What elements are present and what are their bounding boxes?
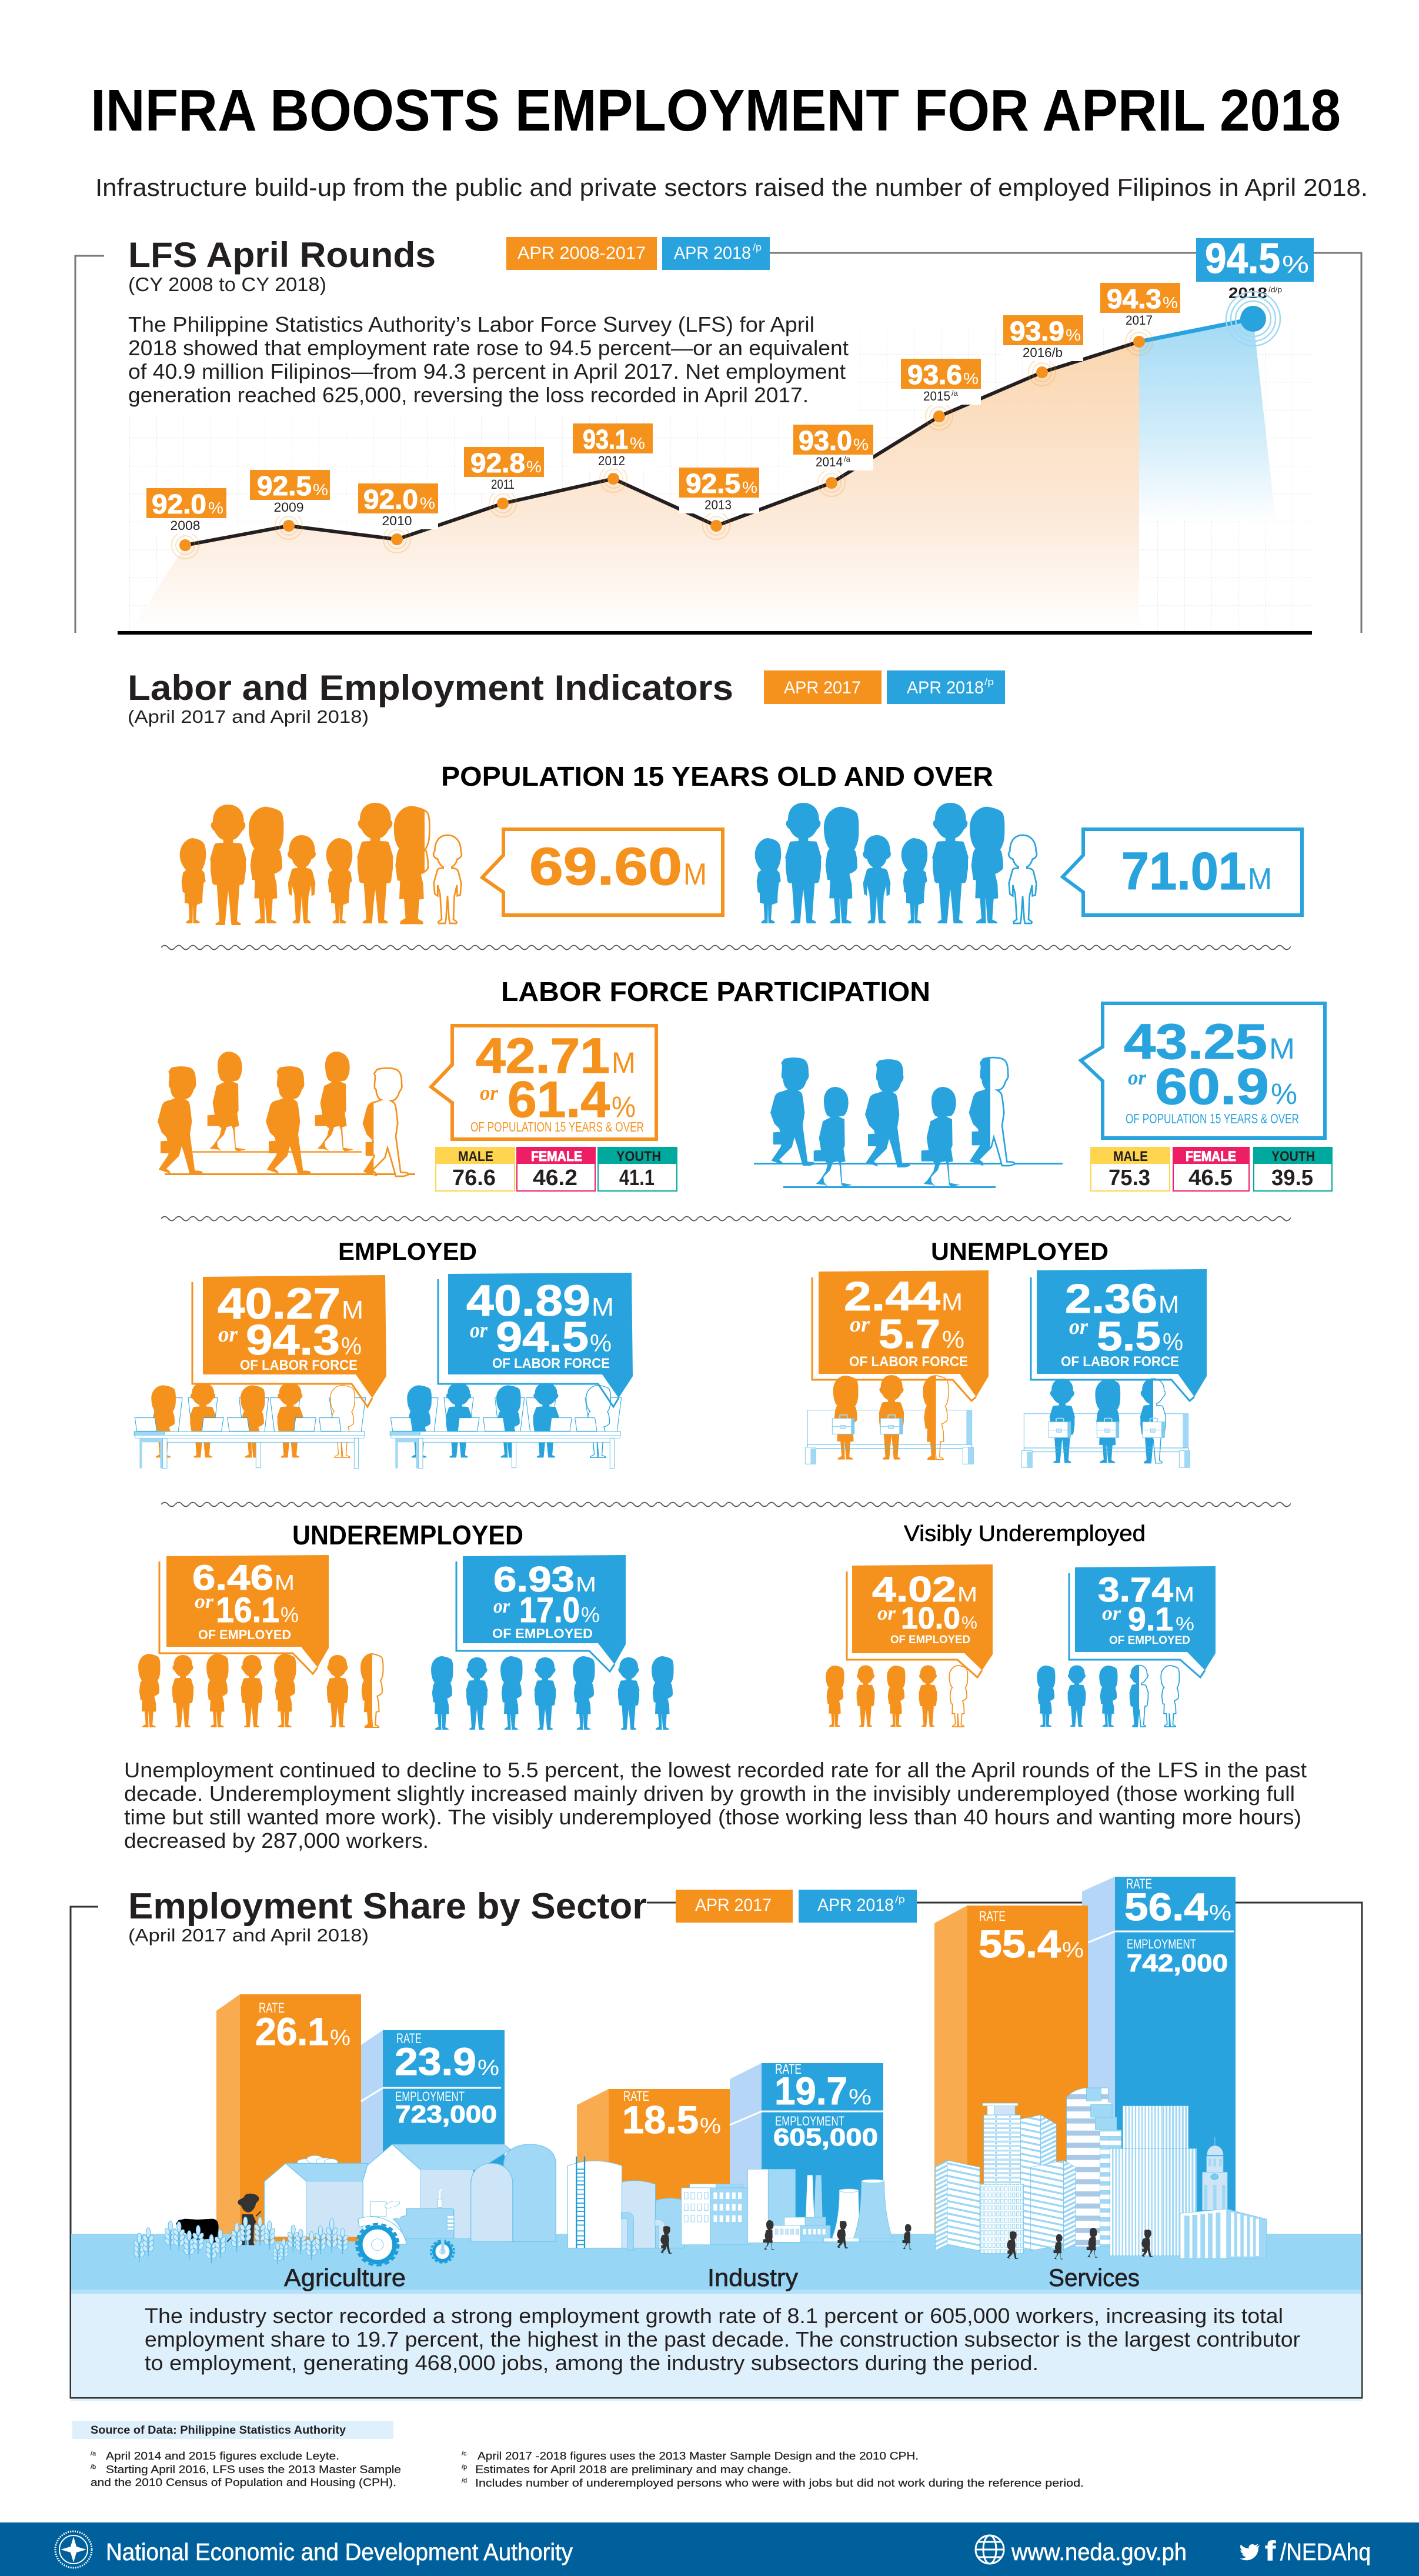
bar: services 2018: 56.4: [1124, 1885, 1208, 1928]
callout: 4.02M visibly underemployed 2017: 4.02: [872, 1570, 956, 1609]
label 2013: [679, 468, 759, 513]
panel: Employment Share by Sector: [71, 1876, 1362, 2401]
text: website: www.neda.gov.ph: [1011, 2538, 1187, 2565]
label 2009: 92.5: [257, 471, 312, 501]
legend: /p: [984, 676, 994, 688]
source box: [72, 2421, 393, 2439]
icon: desk workers 2017: [134, 1383, 366, 1469]
label 2018: [1196, 235, 1314, 302]
table: participation rates 2018: [1091, 1147, 1332, 1191]
table: participation rates 2018: MALE: [1113, 1149, 1148, 1164]
bar: agriculture 2018: %: [478, 2056, 499, 2080]
callout: 2.44M unemployed 2017: 2.44: [844, 1273, 940, 1319]
footnotes: /p: [462, 2464, 467, 2471]
callout: 42.71M or 61.4%: or: [480, 1081, 499, 1105]
callout: 43.25M or 60.9%: 60.9: [1155, 1059, 1269, 1115]
text block: unemployment summary: time but still wanted more work). The visibly underemployed (those working less than 40 hours and wanting more hours): [124, 1805, 1301, 1829]
label 2011: %: [526, 458, 542, 476]
callout: 71.01M: M: [1248, 862, 1272, 896]
text block: unemployment summary: [124, 1758, 1307, 1853]
label 2008: 2008: [171, 518, 200, 533]
table: participation rates 2017: MALE: [458, 1149, 493, 1164]
callout: 42.71M or 61.4%: [431, 1026, 656, 1139]
callout: 43.25M or 60.9%: 43.25: [1124, 1014, 1267, 1069]
chart: employment rate area and line: [118, 319, 1314, 635]
callout: 40.27M employed 2017: or: [218, 1322, 238, 1347]
legend: APR 2017: [695, 1896, 772, 1915]
panel: LFS April Rounds: [75, 235, 1361, 635]
callout: 2.44M unemployed 2017: or: [850, 1312, 870, 1337]
bar: services 2018: %: [1209, 1901, 1231, 1926]
callout: 3.74M visibly underemployed 2018: %: [1176, 1613, 1194, 1634]
table: participation rates 2017: FEMALE: [531, 1149, 582, 1164]
label 2012: [573, 423, 653, 469]
callout: 6.93M underemployed 2018: or: [493, 1596, 510, 1617]
callout: 6.46M underemployed 2017: 6.46: [192, 1558, 273, 1597]
heading: employed: EMPLOYED: [338, 1237, 477, 1265]
bar: industry 2018: [730, 2061, 883, 2240]
table: participation rates 2017: YOUTH: [616, 1149, 661, 1164]
callout: 2.44M unemployed 2017: %: [942, 1326, 964, 1353]
label 2015: [901, 359, 981, 405]
callout: 43.25M or 60.9%: OF POPULATION 15 YEARS & OVER: [1126, 1111, 1299, 1126]
label 2018: 2018: [1228, 284, 1267, 302]
footnotes: April 2017 -2018 figures uses the 2013 Master Sample Design and the 2010 CPH.: [478, 2450, 919, 2462]
illustration: city skyline: [936, 2088, 1267, 2258]
legend: /p: [895, 1894, 905, 1905]
bar: industry 2017: 18.5: [622, 2098, 699, 2141]
callout: 71.01M: 71.01: [1121, 842, 1246, 901]
callout: 42.71M or 61.4%: 61.4: [507, 1072, 610, 1128]
text: agency name: National Economic and Development Authority: [106, 2538, 573, 2565]
callout: 6.46M underemployed 2017: or: [195, 1591, 214, 1613]
callout: 40.27M employed 2017: 94.3: [246, 1317, 340, 1364]
callout: 42.71M or 61.4%: %: [612, 1090, 636, 1123]
footnotes: /a: [91, 2450, 96, 2457]
icon: NEDA seal: [55, 2531, 92, 2568]
label 2015: %: [963, 369, 979, 388]
legend: [676, 1890, 917, 1923]
bar: industry 2017: [577, 2088, 730, 2241]
label 2016: [1003, 315, 1083, 361]
callout: 6.46M underemployed 2017: M: [275, 1570, 295, 1594]
text block: unemployment summary: decade. Underemployment slightly increased mainly driven by growth in the invisibly underemployed (those working full: [124, 1781, 1295, 1806]
callout: 2.44M unemployed 2017: OF LABOR FORCE: [849, 1354, 968, 1370]
callout: 40.89M employed 2018: 94.5: [496, 1314, 589, 1361]
table: participation rates 2017: 41.1: [619, 1166, 655, 1190]
callout: 2.36M unemployed 2018: 5.5: [1097, 1313, 1161, 1359]
footnotes: April 2014 and 2015 figures exclude Leyte.: [106, 2450, 339, 2462]
bar: agriculture 2018: RATE: [396, 2031, 422, 2047]
text block: LFS summary: of 40.9 million Filipinos—from 94.3 percent in April 2017. Net employment: [128, 359, 846, 383]
callout: 40.27M employed 2017: %: [341, 1332, 362, 1360]
callout: 40.89M employed 2018: OF LABOR FORCE: [492, 1356, 610, 1372]
label 2010: %: [420, 494, 435, 512]
bar: industry 2018: 19.7: [774, 2069, 847, 2113]
callout: 40.89M employed 2018: M: [592, 1293, 614, 1322]
footnotes: Includes number of underemployed persons who were with jobs but did not work during the reference period.: [475, 2477, 1084, 2489]
bar: industry 2017: %: [700, 2114, 721, 2138]
footer: [0, 2522, 1419, 2576]
source box: Source of Data: Philippine Statistics Authority: [91, 2424, 346, 2437]
label 2012: 2012: [598, 453, 625, 468]
callout: 2.36M unemployed 2018: 2.36: [1065, 1276, 1157, 1322]
legend: APR 2018: [674, 243, 751, 263]
label 2018: 94.5: [1205, 235, 1280, 282]
callout: 4.02M visibly underemployed 2017: OF EMPLOYED: [890, 1634, 970, 1646]
label 2010: 2010: [382, 513, 412, 528]
label 2017: 2017: [1126, 313, 1153, 328]
text block: unemployment summary: decreased by 287,000 workers.: [124, 1828, 429, 1853]
icon: globe: [976, 2535, 1004, 2564]
icon: walkers 2017: [158, 1052, 415, 1176]
bar: services 2017: [934, 1906, 1088, 2235]
bar: services 2018: [1082, 1876, 1236, 2240]
callout: 2.44M unemployed 2017: 5.7: [879, 1311, 940, 1357]
bar: industry 2018: 605,000: [773, 2123, 878, 2151]
bar: services 2017: %: [1062, 1938, 1084, 1963]
callout: 2.36M unemployed 2018: M: [1158, 1290, 1179, 1318]
label 2018: %: [1282, 251, 1309, 278]
label 2008: [146, 488, 226, 534]
callout: 40.27M employed 2017: OF LABOR FORCE: [240, 1357, 358, 1373]
icon: job seekers on bench 2018: [1021, 1379, 1190, 1467]
ground band: [71, 2234, 1361, 2290]
label 2016: 2016/b: [1023, 345, 1063, 360]
table: participation rates 2017: [436, 1147, 677, 1191]
label 2009: [250, 470, 330, 516]
label 2013: 92.5: [686, 468, 740, 499]
label 2015: 93.6: [907, 359, 962, 390]
callout: 6.93M underemployed 2018: 6.93: [493, 1560, 575, 1599]
bar: agriculture 2017: 26.1: [255, 2010, 329, 2053]
callout: 3.74M visibly underemployed 2018: M: [1174, 1582, 1194, 1606]
footnotes: /d: [462, 2477, 467, 2484]
bar: industry 2018: EMPLOYMENT: [775, 2114, 844, 2128]
text block: LFS summary: 2018 showed that employment rate rose to 94.5 percent—or an equivalent: [128, 336, 849, 360]
callout: 43.25M or 60.9%: M: [1269, 1032, 1295, 1065]
callout: 42.71M or 61.4%: 42.71: [476, 1028, 610, 1083]
text block: industry summary: to employment, generating 468,000 jobs, among the industry subsectors during the period.: [145, 2351, 1039, 2375]
text: facebook glyph: f: [1265, 2535, 1276, 2566]
label 2009: 2009: [274, 500, 303, 515]
legend: APR 2017: [784, 678, 861, 698]
heading: underemployed: UNDEREMPLOYED: [292, 1520, 523, 1550]
heading: labor force participation: LABOR FORCE PARTICIPATION: [501, 976, 930, 1007]
callout: 6.46M underemployed 2017: [159, 1555, 329, 1674]
bar: services 2018: EMPLOYMENT: [1127, 1937, 1196, 1951]
callout: 3.74M visibly underemployed 2018: or: [1102, 1603, 1121, 1624]
label: Industry: Industry: [707, 2264, 798, 2291]
callout: 40.27M employed 2017: M: [342, 1296, 363, 1324]
legend: [506, 237, 770, 270]
callout: 4.02M visibly underemployed 2017: [847, 1564, 993, 1677]
callout: 40.89M employed 2018: 40.89: [466, 1276, 590, 1325]
footnotes: and the 2010 Census of Population and Housing (CPH).: [91, 2477, 396, 2488]
label 2017: [1100, 283, 1180, 329]
callout: 69.60M: M: [683, 857, 707, 892]
label 2012: 93.1: [583, 424, 628, 455]
legend: APR 2018: [907, 678, 984, 698]
legend: [764, 670, 1005, 704]
callout: 3.74M visibly underemployed 2018: [1069, 1566, 1216, 1677]
callout: 40.89M employed 2018: or: [470, 1318, 488, 1343]
icon: job seekers on bench 2017: [805, 1375, 973, 1464]
callout: 6.93M underemployed 2018: %: [581, 1603, 600, 1627]
legend: /p: [753, 242, 762, 253]
text block: unemployment summary: Unemployment continued to decline to 5.5 percent, the lowest recorded rate for all the April rounds of the LFS in the past: [124, 1758, 1307, 1782]
icon: underemployed people 2018: [431, 1656, 674, 1730]
legend: APR 2008-2017: [517, 243, 646, 263]
label: Services: Services: [1049, 2264, 1140, 2291]
bar: industry 2018: RATE: [775, 2061, 802, 2077]
bar: agriculture 2018: EMPLOYMENT: [395, 2089, 465, 2104]
icon: desk workers 2018: [390, 1383, 622, 1469]
bar: services 2017: RATE: [979, 1908, 1006, 1924]
data points: [172, 328, 1153, 559]
callout: 2.36M unemployed 2018: %: [1163, 1328, 1183, 1356]
text block: industry summary: The industry sector recorded a strong employment growth rate of 8.1 percent or 605,000 workers, increasing its total: [145, 2304, 1283, 2328]
icon: visibly underemployed people 2017: [826, 1665, 967, 1727]
callout: 4.02M visibly underemployed 2017: M: [957, 1582, 977, 1606]
label 2008: %: [208, 499, 223, 517]
text panel background: [71, 2290, 1362, 2401]
label 2009: %: [313, 481, 328, 499]
label 2015: 2015: [923, 389, 950, 403]
callout: 40.27M employed 2017: 40.27: [218, 1279, 340, 1328]
callout: 2.44M unemployed 2017: M: [941, 1288, 963, 1316]
bar: agriculture 2017: RATE: [259, 2000, 285, 2016]
footnotes: [91, 2450, 1084, 2489]
callout: 6.46M underemployed 2017: 16.1: [216, 1590, 279, 1630]
icon: pedestrians: [660, 2220, 1153, 2260]
bar: agriculture 2017: %: [330, 2026, 350, 2050]
text block: industry summary: employment share to 19.7 percent, the highest in the past decade. The construction subsector is the largest contributor: [145, 2327, 1300, 2351]
icon: family group 2018: [755, 803, 1037, 923]
label 2016: 93.9: [1010, 316, 1064, 346]
footnotes: Estimates for April 2018 are preliminary and may change.: [475, 2464, 792, 2475]
illustration: farm: [133, 2144, 556, 2265]
label 2010: 92.0: [363, 484, 418, 515]
table: participation rates 2018: FEMALE: [1186, 1149, 1236, 1164]
label 2013: 2013: [705, 498, 732, 512]
label 2014: /a: [844, 455, 851, 463]
label 2015: /a: [951, 389, 959, 398]
callout: 2.36M unemployed 2018: [1031, 1269, 1207, 1401]
heading: unemployed: UNEMPLOYED: [931, 1237, 1109, 1265]
icon: visibly underemployed people 2018: [1037, 1665, 1179, 1727]
callout: 69.60M: 69.60: [529, 837, 682, 896]
callout: 40.27M employed 2017: [192, 1275, 386, 1407]
heading: Employment Share by Sector: [128, 1886, 647, 1927]
subheading: (April 2017 and April 2018): [128, 706, 369, 727]
callout: 6.93M underemployed 2018: [456, 1555, 626, 1671]
callout: 40.89M employed 2018: [438, 1273, 633, 1407]
callout: 6.93M underemployed 2018: OF EMPLOYED: [492, 1626, 593, 1641]
icon: family group 2017: [180, 803, 462, 925]
callout: 71.01M: [1063, 829, 1302, 915]
label 2014: [793, 425, 873, 471]
table: participation rates 2018: YOUTH: [1271, 1149, 1315, 1164]
callout: 2.36M unemployed 2018: or: [1069, 1314, 1089, 1339]
callout: 2.44M unemployed 2017: [812, 1270, 989, 1401]
text: social handle: /NEDAhq: [1280, 2538, 1371, 2565]
callout: 4.02M visibly underemployed 2017: or: [877, 1603, 896, 1624]
icon: walkers 2018: [754, 1057, 1063, 1188]
heading: visibly underemployed: Visibly Underemployed: [904, 1521, 1146, 1546]
callout: 43.25M or 60.9%: or: [1128, 1066, 1147, 1089]
label 2016: %: [1066, 326, 1081, 344]
label 2012: %: [630, 434, 645, 452]
subtitle: Infrastructure build-up from the public and private sectors raised the number of employed Filipinos in April 2018.: [95, 173, 1368, 201]
callout: 6.46M underemployed 2017: %: [281, 1603, 299, 1627]
label 2011: 2011: [491, 477, 515, 492]
text block: LFS summary: [128, 312, 849, 407]
bar: services 2017: 55.4: [979, 1922, 1061, 1966]
label 2018: /d/p: [1268, 285, 1282, 294]
bar: agriculture 2017: [216, 1994, 361, 2241]
callout: 6.93M underemployed 2018: 17.0: [519, 1590, 580, 1630]
label 2011: [464, 447, 544, 493]
bar: industry 2018: %: [849, 2085, 872, 2110]
callout: 2.36M unemployed 2018: OF LABOR FORCE: [1061, 1354, 1179, 1370]
legend: APR 2018: [817, 1896, 894, 1915]
icon: underemployed people 2017: [138, 1654, 383, 1727]
heading: Labor and Employment Indicators: Labor and Employment Indicators: [128, 668, 733, 708]
callout: 6.93M underemployed 2018: M: [576, 1572, 596, 1596]
callout: 3.74M visibly underemployed 2018: 9.1: [1128, 1600, 1173, 1637]
callout: 6.46M underemployed 2017: OF EMPLOYED: [198, 1627, 291, 1642]
callout: 69.60M: [482, 829, 723, 915]
callout: 40.89M employed 2018: %: [590, 1329, 612, 1357]
callout: 4.02M visibly underemployed 2017: %: [961, 1613, 977, 1633]
label 2013: %: [742, 478, 757, 496]
title: INFRA BOOSTS EMPLOYMENT FOR APRIL 2018: [91, 78, 1341, 144]
label 2014: %: [853, 435, 869, 453]
text block: industry summary: [145, 2304, 1300, 2375]
callout: 43.25M or 60.9%: %: [1271, 1077, 1297, 1110]
table: participation rates 2018: 75.3: [1109, 1166, 1150, 1190]
heading: LFS April Rounds: LFS April Rounds: [128, 235, 436, 275]
bar: agriculture 2018: 723,000: [395, 2100, 497, 2128]
label 2017: %: [1163, 293, 1178, 312]
footnotes: /b: [91, 2464, 96, 2471]
subheading: (April 2017 and April 2018): [128, 1925, 369, 1946]
text block: LFS summary: generation reached 625,000, reversing the loss recorded in April 2017.: [128, 383, 809, 407]
table: participation rates 2017: 46.2: [533, 1166, 577, 1190]
table: participation rates 2017: 76.6: [452, 1166, 496, 1190]
bar: services 2018: RATE: [1126, 1876, 1152, 1892]
heading: population: POPULATION 15 YEARS OLD AND OVER: [441, 761, 993, 792]
table: participation rates 2018: 39.5: [1271, 1166, 1313, 1190]
callout: 43.25M or 60.9%: [1081, 1003, 1325, 1138]
subheading: (CY 2008 to CY 2018): [128, 273, 326, 295]
bar: services 2018: 742,000: [1127, 1949, 1228, 1977]
footnotes: Starting April 2016, LFS uses the 2013 Master Sample: [106, 2464, 401, 2475]
label 2011: 92.8: [470, 448, 525, 478]
label 2014: 2014: [816, 455, 843, 469]
text block: LFS summary: The Philippine Statistics Authority’s Labor Force Survey (LFS) for April: [128, 312, 814, 336]
label: Agriculture: Agriculture: [284, 2264, 406, 2291]
label 2017: 94.3: [1107, 283, 1161, 314]
bar: industry 2017: RATE: [623, 2088, 649, 2104]
illustration: industrial plant: [567, 2157, 894, 2251]
label 2008: 92.0: [152, 489, 206, 519]
label 2014: 93.0: [799, 425, 852, 456]
bar: agriculture 2018: 23.9: [395, 2040, 476, 2083]
bar: agriculture 2018: [361, 2030, 505, 2236]
callout: 42.71M or 61.4%: M: [612, 1046, 636, 1079]
callout: 3.74M visibly underemployed 2018: OF EMPLOYED: [1109, 1634, 1190, 1647]
highlight dot 2018: [1226, 292, 1280, 346]
table: participation rates 2018: 46.5: [1188, 1166, 1233, 1190]
footnotes: /c: [462, 2450, 467, 2457]
label 2010: [358, 483, 438, 529]
callout: 42.71M or 61.4%: OF POPULATION 15 YEARS & OVER: [470, 1119, 644, 1134]
icon: twitter bird: [1240, 2544, 1260, 2560]
callout: 3.74M visibly underemployed 2018: 3.74: [1098, 1571, 1173, 1609]
callout: 4.02M visibly underemployed 2017: 10.0: [901, 1601, 960, 1636]
